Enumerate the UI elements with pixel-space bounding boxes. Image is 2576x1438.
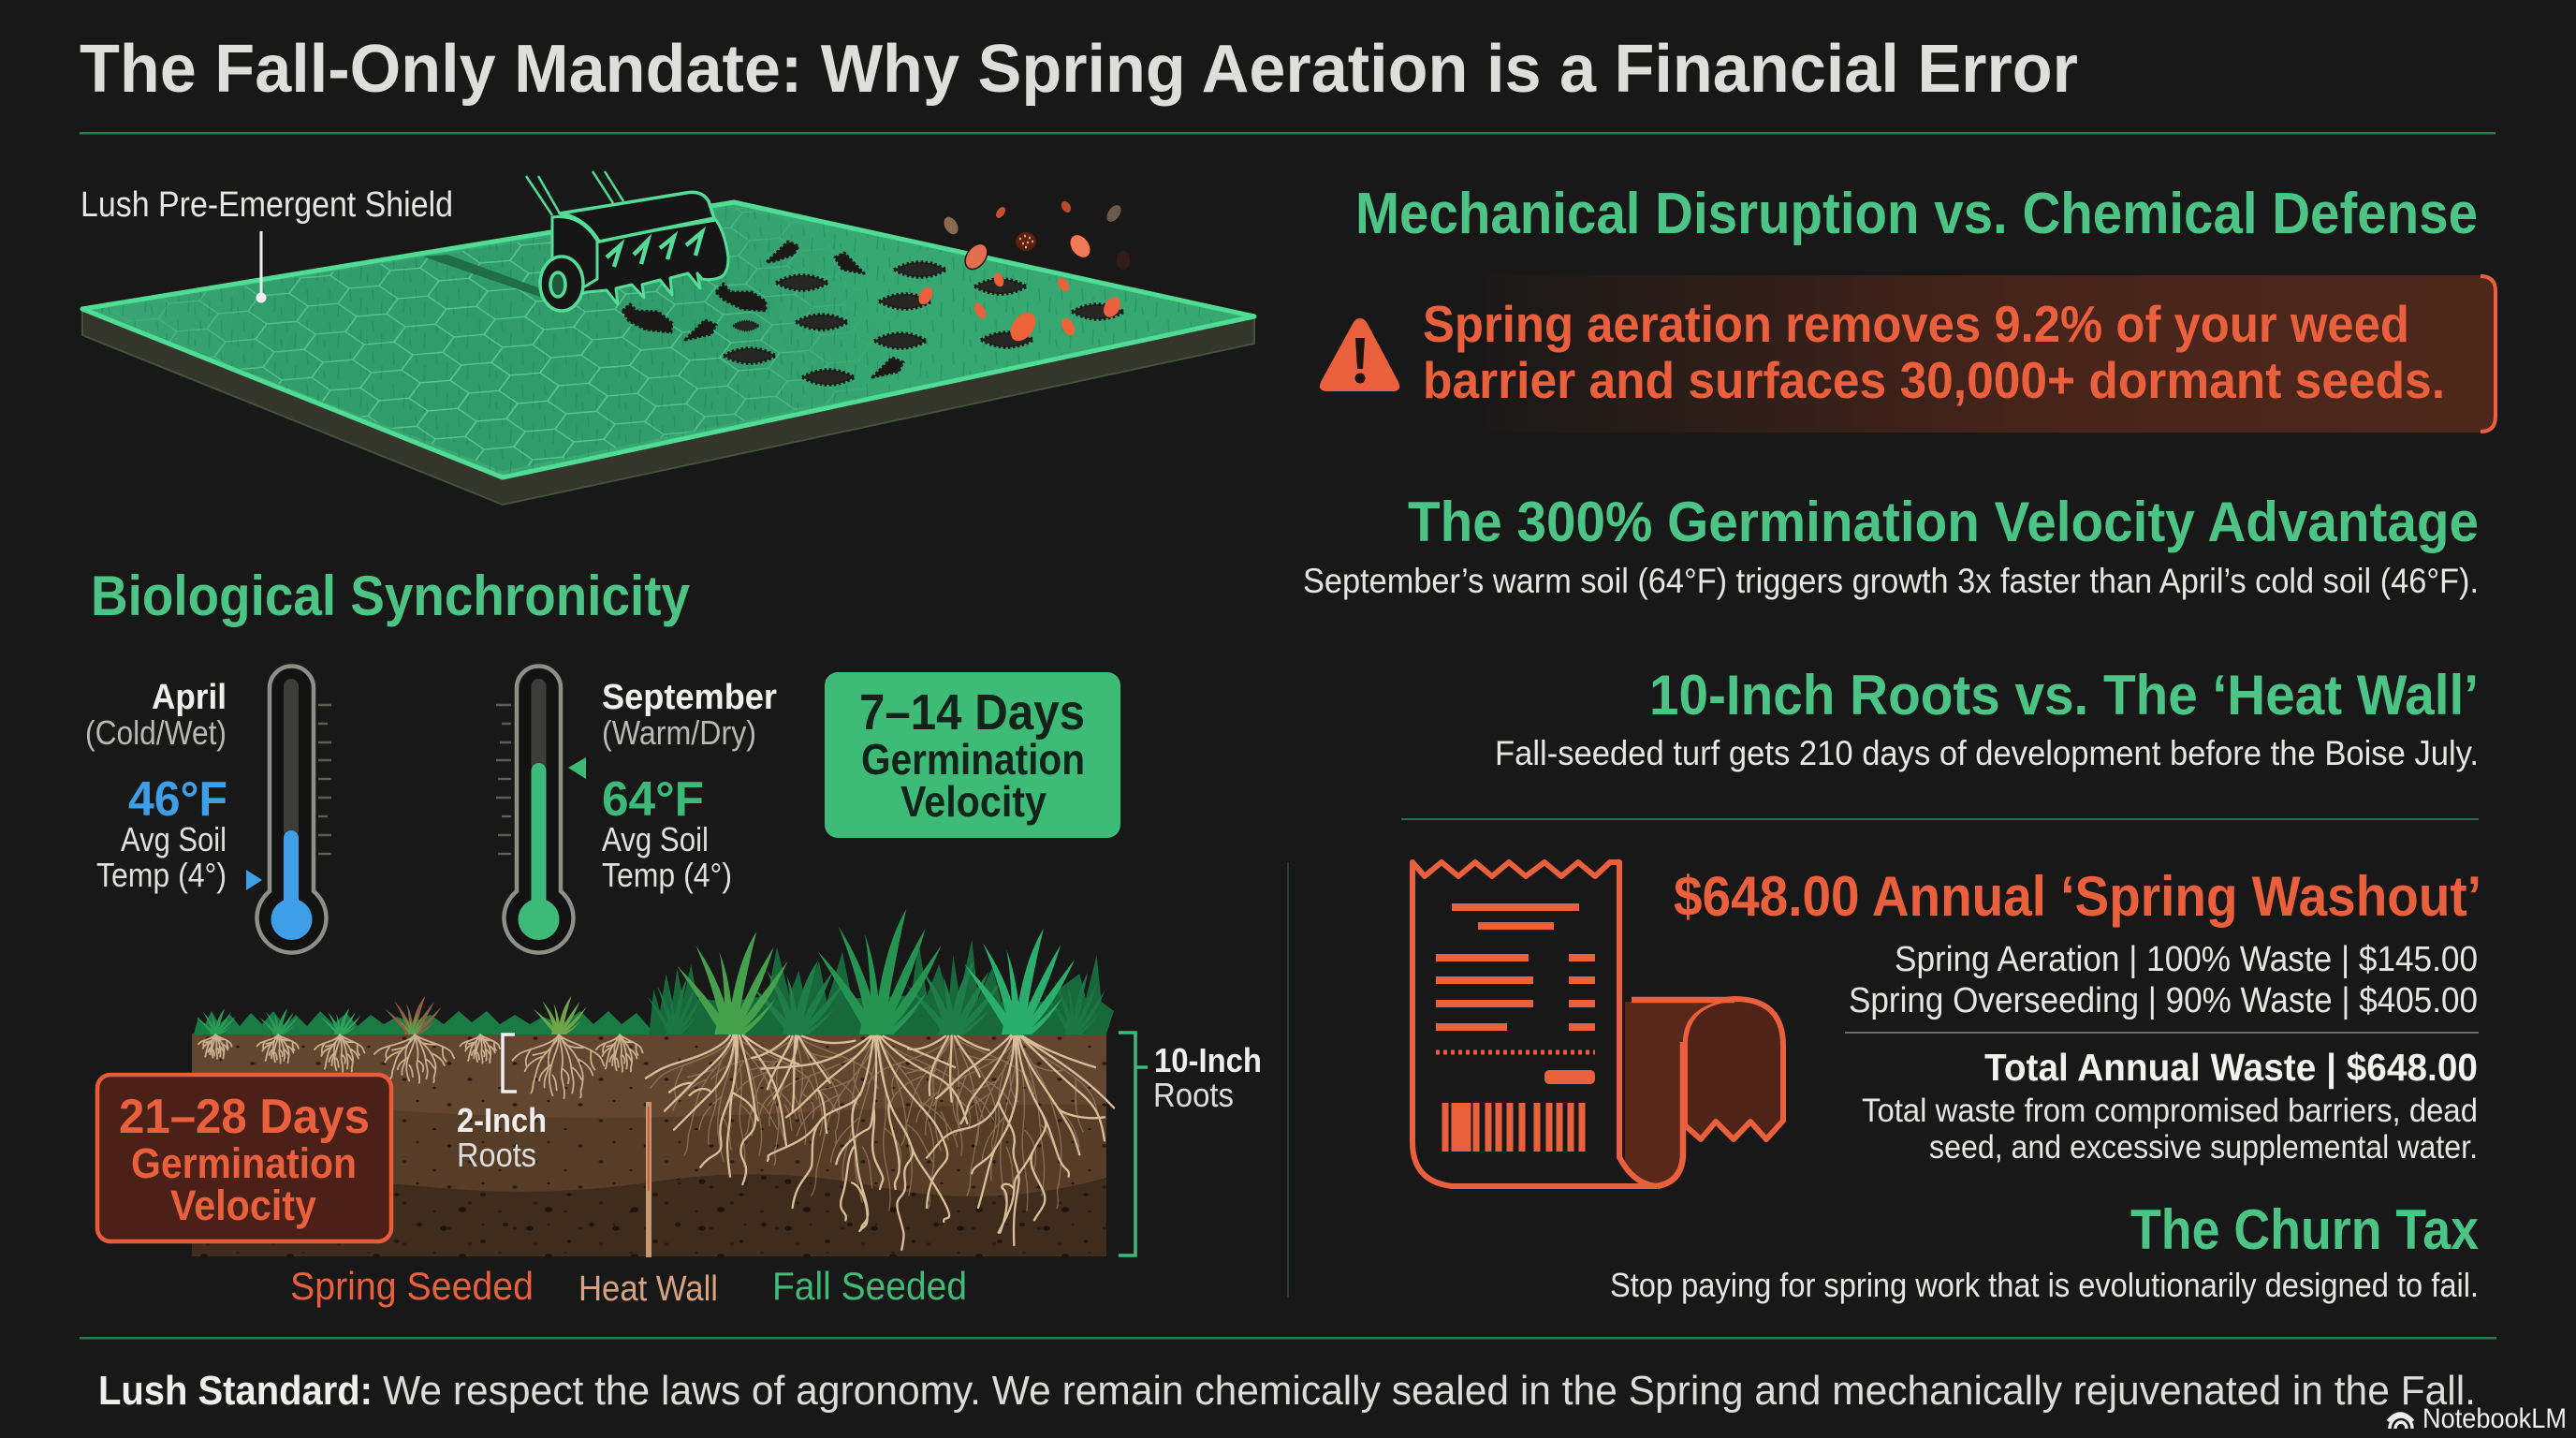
flying seeds <box>915 199 1130 345</box>
shield label: Lush Pre-Emergent Shield <box>80 185 453 225</box>
panel: april thermometer <box>85 666 331 953</box>
2-inch label: 2-Inch <box>457 1101 547 1139</box>
text: 300% advantage body: September’s warm soil (64°F) triggers growth 3x faster than April’s cold soil (46°F). <box>1303 562 2479 600</box>
text: waste explanation: seed, and excessive supplemental water. <box>1929 1129 2478 1166</box>
fall roots fine underlay <box>651 1034 1100 1211</box>
receipt roll <box>1625 999 1783 1186</box>
aeration holes <box>724 262 1124 385</box>
text: churn tax body: Stop paying for spring work that is evolutionarily designed to fail. <box>1610 1266 2479 1304</box>
callout: 21-28 days: Velocity <box>170 1181 316 1229</box>
root system five <box>927 1035 1114 1245</box>
heading: 300% advantage: The 300% Germination Velocity Advantage <box>1408 491 2479 553</box>
icon: receipt <box>1412 862 1783 1186</box>
heading: roots vs heat wall: 10-Inch Roots vs. The ‘Heat Wall’ <box>1649 664 2479 726</box>
panel: september thermometer <box>496 666 777 953</box>
platform top <box>82 202 1254 477</box>
caption <box>96 820 227 894</box>
callout text: Spring aeration removes 9.2% of your weed <box>1423 295 2409 353</box>
root system three <box>761 1036 967 1250</box>
temperature: 64°F <box>602 772 704 827</box>
footer statement: Lush Standard: <box>98 1368 373 1414</box>
month label: April <box>152 678 227 717</box>
temperature: 46°F <box>128 772 227 827</box>
root system two <box>752 1036 855 1111</box>
barcode <box>1445 1103 1582 1152</box>
title: The Fall-Only Mandate: Why Spring Aeration is a Financial Error <box>80 32 2078 107</box>
panel: turf platform with aerator <box>80 171 1254 505</box>
mercury <box>519 679 560 940</box>
month label: September <box>602 678 777 717</box>
mercury <box>271 679 313 940</box>
caption: Avg Soil <box>121 820 227 858</box>
callout text <box>1423 295 2445 409</box>
footer statement: We respect the laws of agronomy. We remain chemically sealed in the Spring and mechanically rejuvenated in the Fall. <box>383 1368 2476 1414</box>
marker <box>246 870 262 890</box>
tall fall grass <box>648 909 1114 1034</box>
marker <box>568 757 586 779</box>
callout background <box>1471 275 2496 433</box>
soil layers <box>192 1034 1106 1256</box>
callout: 7-14 days: Velocity <box>900 777 1046 826</box>
root system one <box>646 1035 798 1184</box>
10-inch label <box>1153 1041 1262 1114</box>
text: waste explanation <box>1862 1093 2478 1166</box>
dotted line <box>1436 1050 1595 1054</box>
condition: (Cold/Wet) <box>85 713 227 752</box>
total waste line: Total Annual Waste | $648.00 <box>1984 1046 2478 1089</box>
callout: 7-14 days <box>825 672 1120 838</box>
callout: spring aeration warning <box>1320 275 2496 433</box>
short spring grass <box>194 996 655 1034</box>
heading: biological synchronicity: Biological Synchronicity <box>91 565 691 627</box>
spring roots <box>198 1034 643 1098</box>
10-inch label: 10-Inch <box>1154 1041 1262 1079</box>
thermometer body <box>256 666 326 953</box>
2-inch label <box>457 1101 547 1174</box>
condition: (Warm/Dry) <box>602 713 756 752</box>
10-inch label: Roots <box>1153 1076 1234 1114</box>
front tufts <box>677 932 788 1034</box>
heading: churn tax: The Churn Tax <box>2130 1198 2479 1261</box>
text: waste explanation: Total waste from compromised barriers, dead <box>1862 1093 2478 1129</box>
receipt lines <box>1436 903 1595 1084</box>
callout: 21-28 days <box>97 1075 391 1241</box>
2-inch label: Roots <box>457 1136 536 1174</box>
heat wall label: Heat Wall <box>578 1269 718 1309</box>
back grass <box>649 939 1114 1034</box>
caption: Avg Soil <box>602 820 709 858</box>
heading: spring washout: $648.00 Annual ‘Spring Washout’ <box>1674 865 2481 928</box>
aerator track <box>423 255 540 297</box>
ticks <box>496 705 511 854</box>
callout: 21-28 days: Germination <box>131 1139 357 1187</box>
table: waste line items: Spring Overseeding | 90% Waste | $405.00 <box>1849 981 2478 1020</box>
ticks <box>318 705 331 854</box>
2-inch bracket <box>503 1034 517 1092</box>
caption: Temp (4°) <box>96 856 227 894</box>
10-inch bracket <box>1119 1033 1148 1255</box>
panel: soil cross-section <box>192 909 1262 1309</box>
callout: 7-14 days: Germination <box>861 735 1085 784</box>
turf plugs <box>622 242 903 377</box>
caption <box>602 820 732 894</box>
table: waste line items: Spring Aeration | 100% Waste | $145.00 <box>1895 940 2478 979</box>
thermometer body <box>504 666 573 953</box>
callout edge <box>2481 276 2496 432</box>
hexagon shield pattern <box>135 208 848 466</box>
heading: mechanical disruption: Mechanical Disruption vs. Chemical Defense <box>1355 182 2478 246</box>
icon: warning triangle <box>1320 318 1399 391</box>
callout: 7-14 days: 7–14 Days <box>859 684 1085 741</box>
text: roots body: Fall-seeded turf gets 210 days of development before the Boise July. <box>1495 734 2479 772</box>
callout text: barrier and surfaces 30,000+ dormant seeds. <box>1423 351 2445 409</box>
fall roots <box>646 1035 1114 1250</box>
receipt body <box>1412 862 1657 1186</box>
fall seeded label: Fall Seeded <box>772 1264 967 1308</box>
heat wall line <box>646 1102 651 1257</box>
root system four <box>908 1036 989 1102</box>
aerator machine <box>526 171 728 311</box>
callout: 21-28 days: 21–28 Days <box>119 1090 370 1144</box>
platform sides <box>82 309 1254 505</box>
caption: Temp (4°) <box>602 856 732 894</box>
shield pointer <box>256 231 266 303</box>
table: waste line items <box>1849 940 2478 1020</box>
spring seeded label: Spring Seeded <box>290 1264 534 1308</box>
